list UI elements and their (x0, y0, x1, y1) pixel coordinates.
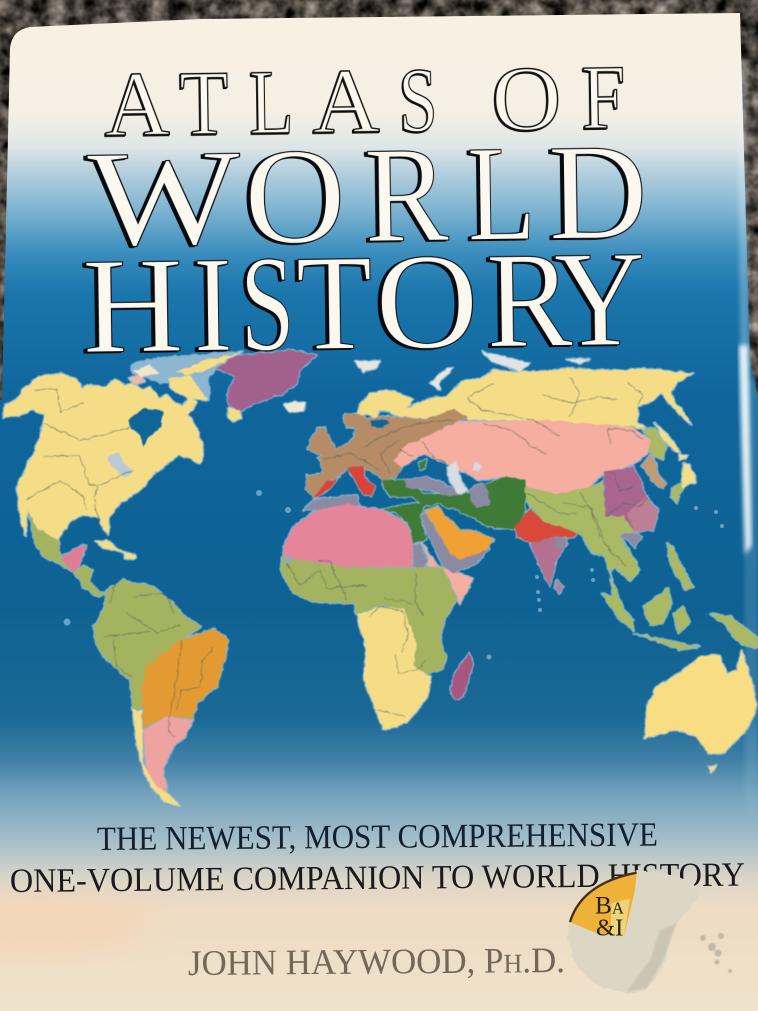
Svalbard (355, 360, 380, 372)
Italy (347, 466, 375, 497)
Southern Africa (357, 607, 431, 730)
title: HISTORY: S (239, 227, 295, 380)
right edge crease (737, 60, 758, 830)
wedge border (570, 873, 637, 922)
Novaya Zemlya (430, 368, 453, 390)
Brazil (142, 628, 228, 728)
Greenland (217, 350, 317, 412)
sticker letters BA: BA (595, 891, 624, 919)
Java (633, 633, 700, 650)
title: ATLAS OF: L (249, 51, 294, 153)
title: WORLD: R (363, 118, 450, 271)
Siberian Arctic (482, 352, 530, 372)
Central Africa (282, 557, 457, 675)
Sahara (283, 503, 413, 567)
title: HISTORY: I (192, 228, 233, 381)
New Guinea (710, 613, 758, 648)
map: Europe, Africa, Asia and Australia (282, 352, 758, 773)
rivers (287, 377, 648, 717)
North India (515, 508, 582, 543)
Mexico (28, 510, 72, 572)
Banks island (128, 375, 145, 385)
Hispaniola (123, 553, 137, 558)
Northern Eurasia (357, 368, 693, 429)
Victoria island (133, 364, 159, 377)
China (603, 467, 658, 531)
South East Asia (525, 482, 640, 582)
peach light at bottom left (0, 893, 150, 957)
Persia grey (470, 483, 490, 509)
title: ATLAS OF: A (312, 50, 380, 152)
title: HISTORY: T (295, 226, 373, 379)
Baltic Sea (371, 419, 390, 428)
sticker residue (568, 871, 699, 993)
Severnaya Zemlya (567, 358, 590, 364)
Sakhalin (655, 422, 680, 452)
Arctic archipelago haze (132, 352, 243, 400)
title: HISTORY: R (485, 223, 574, 377)
pale label fragment (610, 898, 630, 937)
Honshu (680, 463, 696, 489)
Far East (642, 428, 667, 459)
title: ATLAS OF: T (179, 52, 229, 154)
Anatolia grey (405, 477, 460, 497)
Horn of Africa (420, 540, 473, 604)
Philippines (667, 543, 693, 590)
stain spots (700, 933, 732, 973)
Yucatan (62, 545, 87, 572)
South America north (93, 580, 202, 710)
Crimea (418, 459, 427, 470)
Central America (75, 566, 107, 597)
Baffin island (168, 375, 208, 400)
title: WORLD: D (547, 115, 648, 269)
title: WORLD (86, 115, 648, 275)
sticker letters ampersand: &I (596, 914, 623, 941)
rivers (27, 388, 213, 738)
Madagascar (450, 653, 473, 700)
Korea (642, 455, 667, 489)
Middle East (382, 476, 525, 543)
Ellesmere island (177, 353, 242, 375)
Hudson Bay (128, 408, 163, 447)
Cuba (95, 540, 130, 555)
Greenland tip (228, 408, 242, 422)
title: ATLAS OF: A (104, 52, 170, 155)
Great Lakes (107, 453, 133, 478)
title: HISTORY: H (81, 229, 184, 382)
world map (3, 350, 758, 807)
Vietnam grey (620, 533, 642, 548)
Britain (307, 427, 337, 455)
title: HISTORY: O (374, 225, 479, 378)
Hokkaido (678, 453, 688, 459)
map: Americas (3, 350, 317, 807)
title: ATLAS OF: F (581, 46, 626, 149)
Spain coast (313, 478, 337, 497)
small islands (64, 490, 724, 660)
title: WORLD: W (86, 121, 242, 275)
Arabia (425, 507, 493, 560)
Aral (473, 462, 482, 472)
Iceland (283, 402, 306, 412)
Malaya (610, 573, 630, 623)
Sulawesi (673, 607, 690, 633)
Sri Lanka (555, 580, 563, 593)
Egypt (413, 543, 427, 571)
South China (627, 497, 658, 531)
Argentina (143, 717, 193, 797)
title: ATLAS OF (104, 46, 626, 155)
Tasmania (708, 765, 717, 773)
author: JOHN HAYWOOD, PH.D. (188, 940, 565, 983)
Chile (133, 710, 180, 807)
title: WORLD: L (466, 117, 536, 270)
title: HISTORY: Y (553, 222, 646, 376)
Deccan (555, 537, 567, 550)
Central Asia (393, 420, 651, 494)
subtitle (10, 817, 745, 900)
title: ATLAS OF: S (398, 49, 438, 151)
subtitle line 1: THE NEWEST, MOST COMPREHENSIVE (97, 817, 658, 858)
Borneo (643, 588, 672, 625)
title: WORLD: O (243, 119, 346, 273)
South India (530, 537, 567, 587)
North Africa (303, 495, 360, 510)
stain shade (627, 923, 677, 992)
Arabia edge (420, 512, 490, 573)
Southern Japan (671, 482, 682, 503)
paper stain (568, 871, 699, 993)
orange label wedge (570, 873, 637, 937)
North America (3, 373, 203, 540)
Australia (645, 650, 757, 753)
Caspian (447, 462, 468, 493)
title: ATLAS OF: O (491, 47, 562, 150)
Sumatra (602, 593, 633, 631)
title: HISTORY (81, 222, 646, 382)
Europe (306, 409, 468, 498)
